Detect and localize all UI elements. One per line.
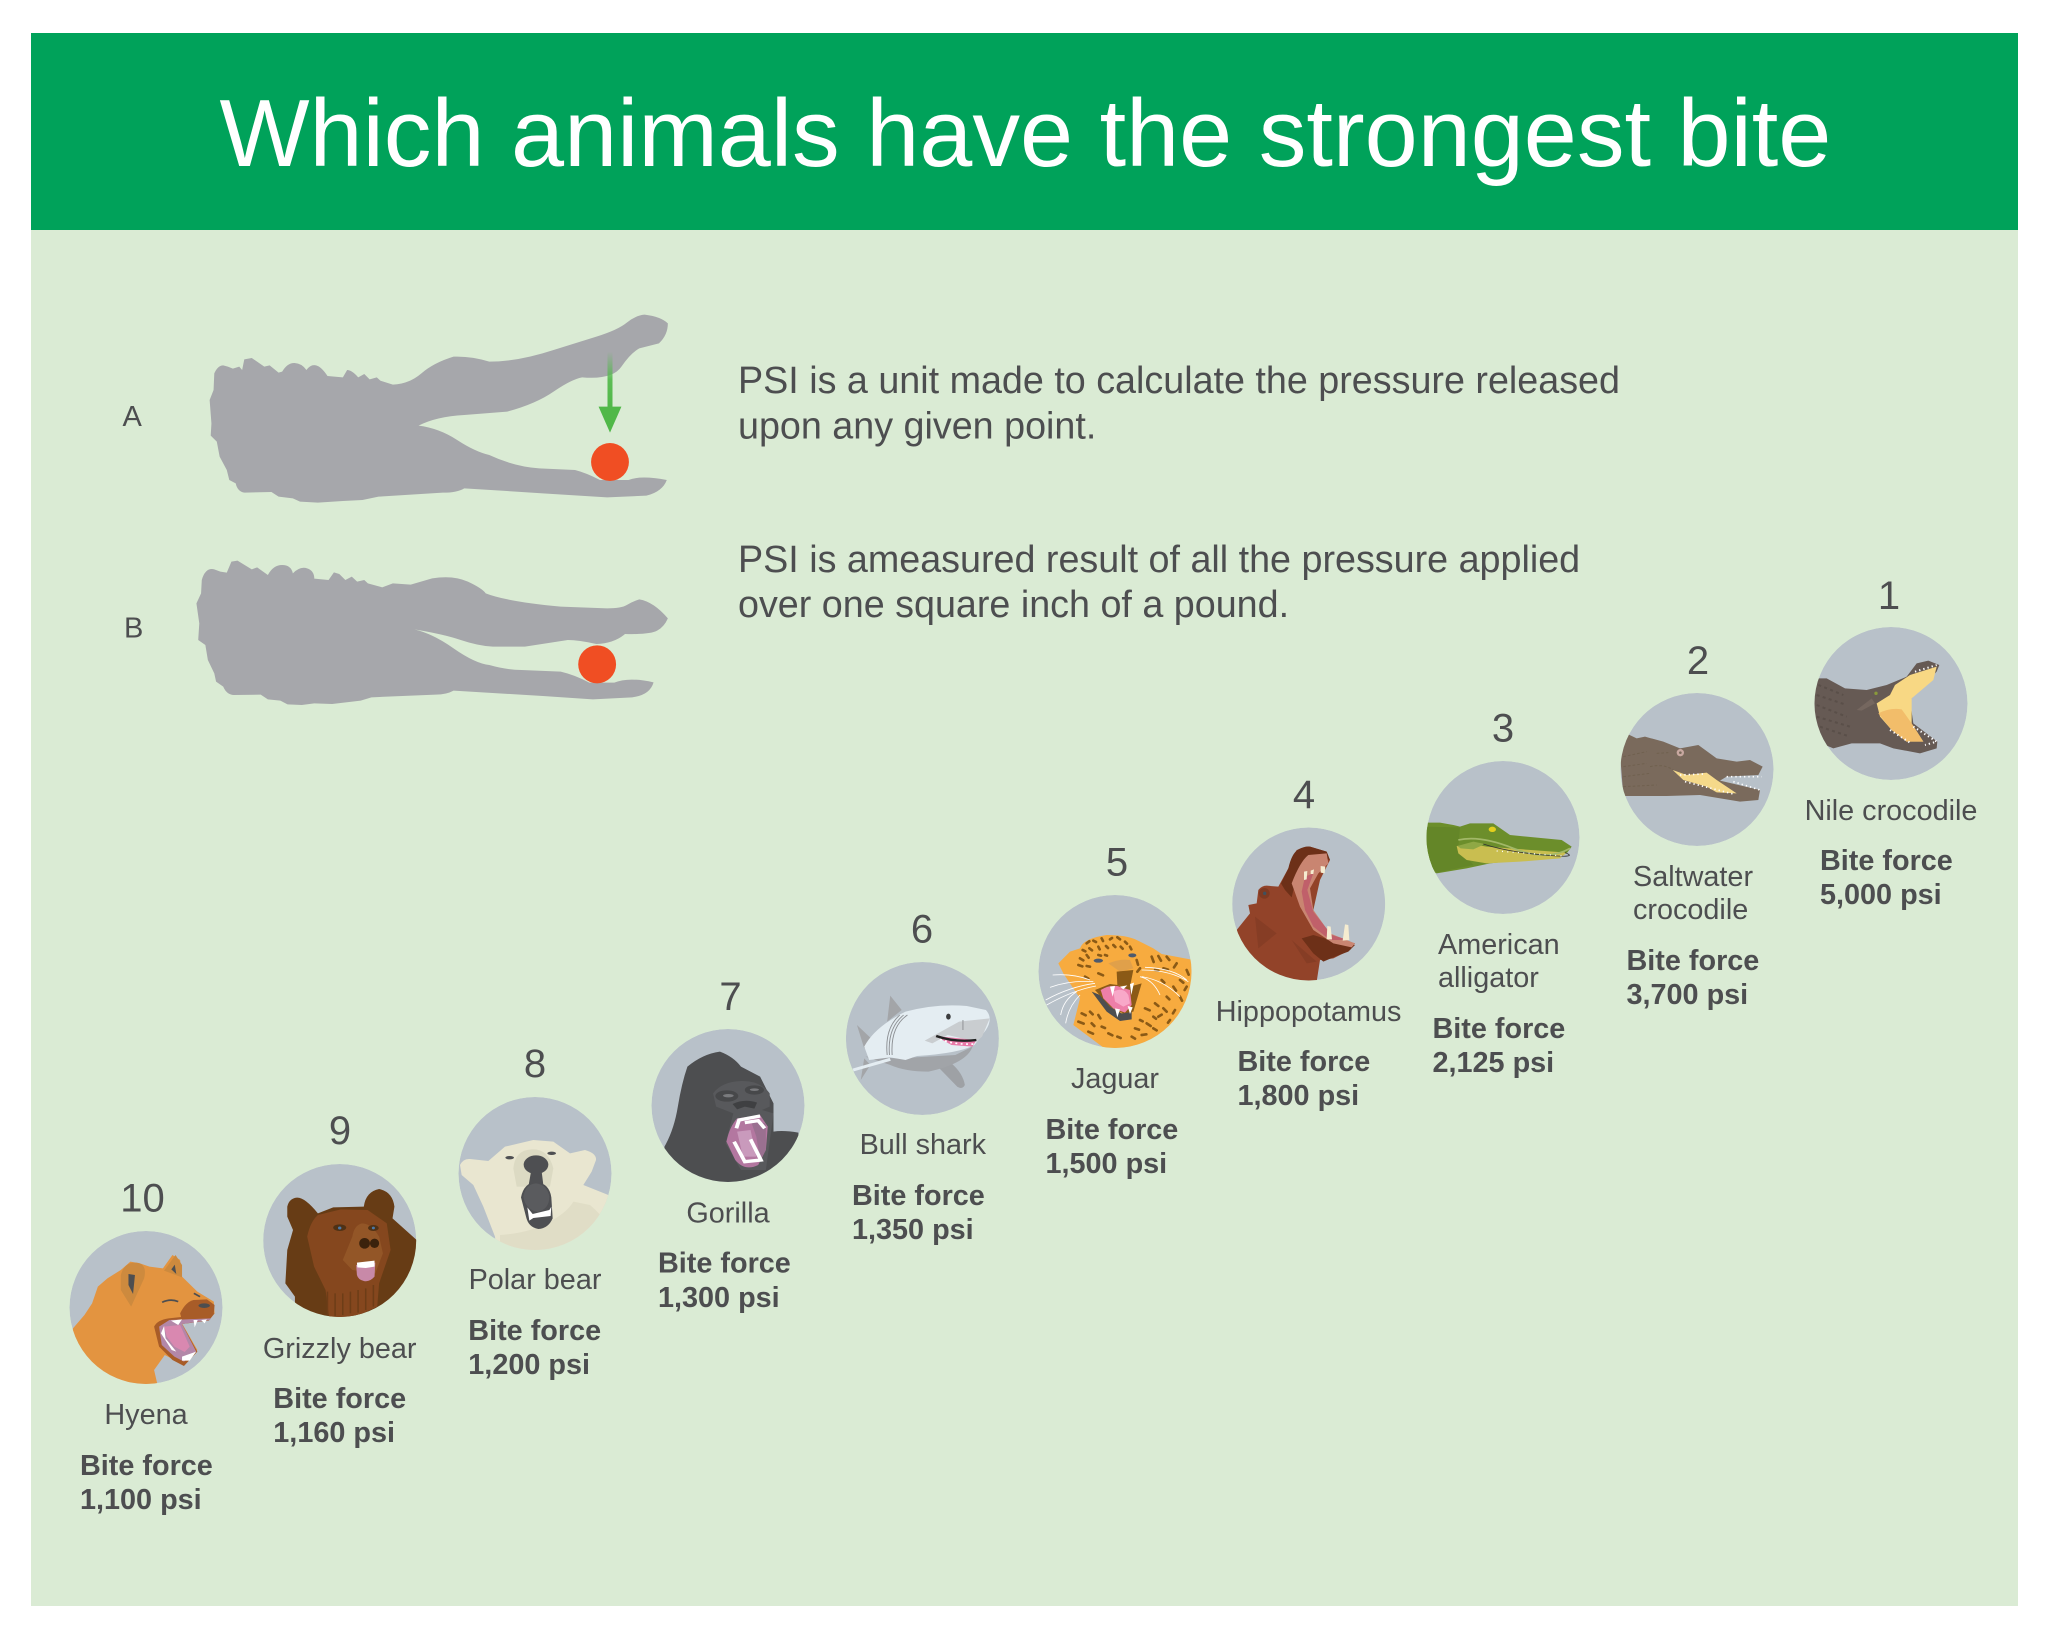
bite force: Bite force	[852, 1180, 985, 1212]
rank number: 4	[1293, 773, 1315, 817]
animal name: crocodile	[1633, 894, 1748, 926]
animal name: Saltwater	[1633, 861, 1753, 893]
bite force: 3,700 psi	[1626, 979, 1748, 1011]
animal name: Jaguar	[1071, 1063, 1159, 1095]
entry 9: grizzly bear	[263, 1109, 417, 1449]
entry 10: hyena	[65, 1176, 222, 1516]
rank number: 10	[120, 1176, 165, 1220]
diagram B: crocodile silhouette closing on ball	[196, 561, 668, 705]
bite force: Bite force	[468, 1315, 601, 1347]
bite force: Bite force	[1820, 845, 1953, 877]
ball	[578, 645, 616, 683]
rank number: 3	[1492, 706, 1514, 750]
entry 6: bull shark	[846, 908, 999, 1246]
title: Which animals have the strongest bite	[220, 81, 1831, 187]
entry 7: gorilla	[652, 975, 804, 1314]
bite force: 1,500 psi	[1046, 1148, 1167, 1180]
bite force: Bite force	[80, 1450, 213, 1482]
entry 8: polar bear	[458, 1042, 613, 1381]
animal name: American	[1438, 929, 1560, 961]
icon: saltwater crocodile	[1620, 693, 1774, 846]
silhouette: crocodile open jaws	[210, 315, 668, 503]
animal name: Gorilla	[686, 1198, 771, 1230]
entry 1: Nile crocodile	[1805, 574, 1977, 911]
bite force: Bite force	[658, 1248, 791, 1280]
icon: hyena	[65, 1231, 222, 1393]
label: A: A	[122, 401, 142, 433]
rank number: 9	[329, 1109, 351, 1153]
bite force: Bite force	[1046, 1114, 1178, 1146]
entry 4: hippopotamus	[1216, 773, 1401, 1112]
text block: PSI definition A: PSI is a unit made to calculate the pressure released	[738, 359, 1620, 401]
icon: grizzly bear	[263, 1164, 417, 1320]
label: B: B	[124, 612, 143, 644]
diagram A: crocodile silhouette with ball and arrow	[210, 315, 668, 503]
bite force: Bite force	[1626, 945, 1759, 977]
title banner	[31, 33, 2018, 230]
muzzle and open mouth	[521, 1155, 553, 1229]
icon: jaguar	[1038, 895, 1193, 1050]
bite force: 1,160 psi	[273, 1417, 395, 1449]
animal name: Nile crocodile	[1805, 795, 1977, 827]
icon: polar bear	[458, 1097, 613, 1253]
text block: PSI definition A: upon any given point.	[738, 404, 1096, 446]
animal name: Bull shark	[860, 1129, 987, 1161]
icon: Nile crocodile	[1812, 627, 1968, 780]
bite force: 5,000 psi	[1820, 879, 1942, 911]
bite force: 1,800 psi	[1238, 1080, 1359, 1112]
animal name: Polar bear	[469, 1264, 602, 1296]
bite force: 2,125 psi	[1432, 1047, 1554, 1079]
animal name: alligator	[1438, 962, 1539, 994]
icon: gorilla	[652, 1029, 804, 1187]
bite force: 1,200 psi	[468, 1349, 590, 1381]
text block: PSI definition B: PSI is ameasured result of all the pressure applied	[738, 538, 1580, 580]
rank number: 7	[719, 975, 742, 1019]
bite force: Bite force	[273, 1383, 406, 1415]
animal name: Hyena	[104, 1399, 189, 1431]
ball	[591, 443, 629, 481]
icon: American alligator	[1423, 761, 1580, 914]
text block: PSI definition B: over one square inch of a pound.	[738, 583, 1289, 625]
bite force: 1,300 psi	[658, 1282, 780, 1314]
entry 2: saltwater crocodile	[1620, 639, 1774, 1011]
silhouette: crocodile closed jaws	[196, 561, 668, 705]
bite force: 1,350 psi	[852, 1214, 974, 1246]
animal name: Hippopotamus	[1216, 996, 1401, 1028]
entry 5: jaguar	[1038, 840, 1193, 1180]
bite force: 1,100 psi	[80, 1484, 202, 1516]
bite force: Bite force	[1238, 1046, 1370, 1078]
rank number: 2	[1687, 639, 1709, 683]
icon: bull shark	[846, 962, 999, 1115]
arrow: pressure	[599, 352, 621, 433]
icon: hippopotamus	[1232, 828, 1385, 982]
rank number: 6	[911, 908, 933, 952]
bite force: Bite force	[1432, 1013, 1565, 1045]
entry 3: American alligator	[1423, 706, 1580, 1079]
rank number: 8	[524, 1042, 546, 1086]
rank number: 1	[1878, 574, 1900, 618]
animal name: Grizzly bear	[263, 1333, 417, 1365]
rank number: 5	[1106, 840, 1128, 884]
